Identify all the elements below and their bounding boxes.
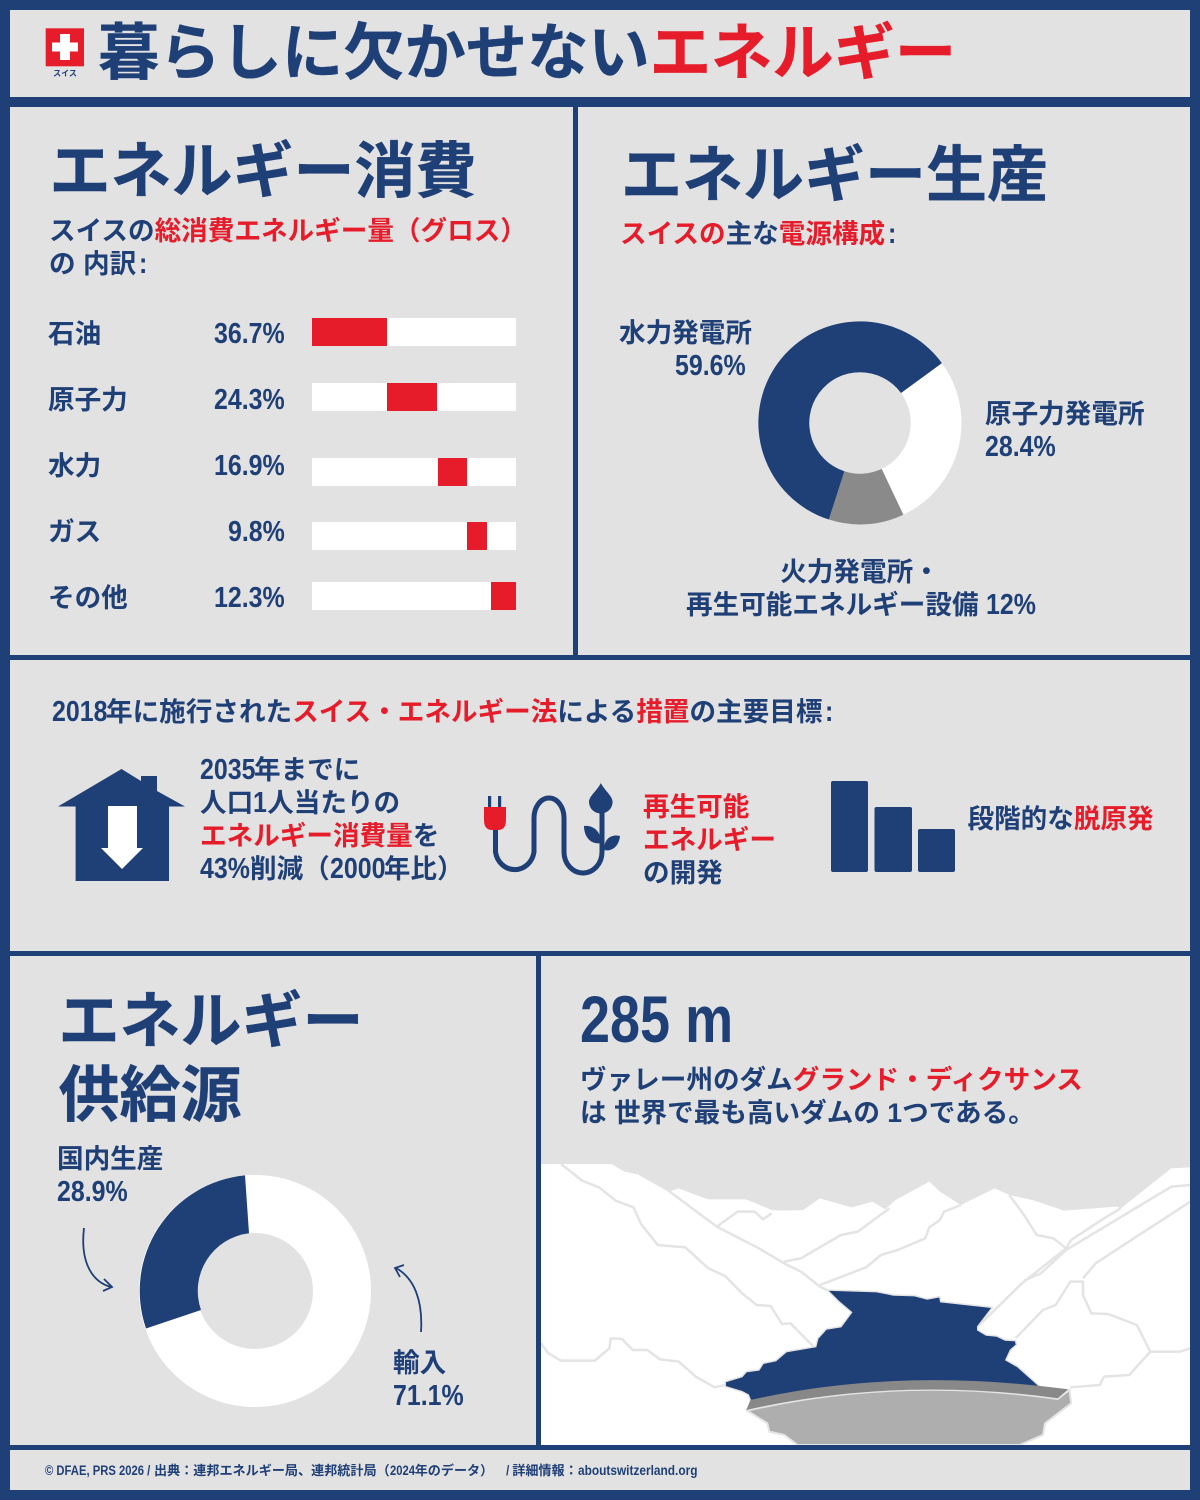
row: nuclear: 原子力 [48,385,128,415]
text: goal 3: 段階的な脱原発 [968,804,1154,834]
icon: house with down arrow [58,769,185,881]
subheading: power mix: スイスの主な電源構成 [620,219,885,249]
row: oil: 石油 [48,319,101,349]
row: other: 12.3% [214,582,285,614]
panel: energy act goals [10,660,1190,951]
text: goal 1 [200,754,464,885]
label: thermal and renewables [686,557,1036,621]
text: goal 1: 1 [253,787,267,819]
header band [10,10,1190,97]
subheading: gross consumption breakdown: : [139,248,147,280]
text: goal 2: 再生可能 [643,792,749,822]
label: nuclear plants [985,399,1145,463]
source text: 2024 [390,1463,415,1478]
label: imports: 輸入 [393,1348,446,1378]
source text: aboutswitzerland.org [578,1463,697,1478]
heading: energy consumption: エネルギー消費 [50,137,477,205]
row: oil: 36.7% [214,318,285,350]
label: hydro plants: 59.6% [675,350,746,382]
label: hydro plants [619,318,752,382]
donut chart: supply [139,1175,371,1407]
label: thermal and renewables: 再生可能エネルギー設備 [686,590,979,620]
row: nuclear [48,384,285,416]
heading: energy supply sources [58,987,364,1129]
row: oil [48,318,285,350]
heading: energy supply sources: 供給源 [58,1061,242,1129]
row: hydro: 水力 [48,451,101,481]
label: nuclear plants: 28.4% [985,431,1056,463]
subheading: gross consumption breakdown [49,216,527,280]
source text [45,1463,697,1478]
heading: energy supply sources: エネルギー [58,987,364,1055]
heading: measures of the 2018 Energy Act: 2018 [52,696,107,728]
bar: other [312,582,516,610]
text: world's highest dam [580,1065,1083,1128]
footer: source note [10,1450,1190,1490]
row: other: その他 [48,583,128,613]
label: thermal and renewables: 12% [986,589,1036,621]
title: 暮らしに欠かせないエネルギー [98,19,956,87]
stat: 285 m: 285 m [580,982,733,1056]
heading: energy production: エネルギー生産 [621,141,1048,209]
text: goal 1: 2000 [330,853,385,885]
source text: 出典：連邦エネルギー局、連邦統計局（ 年のデータ） 詳細情報： [154,1463,578,1478]
row: nuclear: 24.3% [214,384,285,416]
bar: oil [312,318,516,346]
text: goal 1: 人口 人当たりの [200,788,400,818]
panel: energy production [578,107,1190,655]
row: hydro: 16.9% [214,450,285,482]
panel: Grande Dixence dam [541,956,1190,1445]
label: imports: 71.1% [393,1380,464,1412]
label: nuclear plants: 原子力発電所 [985,399,1145,429]
bar: gas [312,522,516,550]
icon: descending bars [831,781,955,872]
subheading: power mix: : [888,218,896,250]
text: goal 1: 削減（ 年比） [250,854,464,884]
subheading: gross consumption breakdown: スイスの総消費エネルギー量（グロス） [49,216,527,246]
icon: Swiss flag [46,28,84,78]
text: goal 1: エネルギー消費量を [200,821,439,851]
donut chart: power sources [758,321,962,524]
row: other [48,582,285,614]
illustration: mountains and dam [541,1164,1190,1445]
icon: plug and plant [484,783,620,876]
label: domestic production: 国内生産 [57,1144,163,1174]
text: world's highest dam: は 世界で最も高いダムの 1つである。 [580,1098,1035,1128]
label: thermal and renewables: 火力発電所・ [780,557,940,587]
row: gas [48,516,285,548]
source text: / [506,1463,510,1478]
text: goal 2: エネルギー [643,825,776,855]
text: goal 1: 2035 [200,754,255,786]
bar: hydro [312,458,516,486]
row: hydro [48,450,285,482]
arrow: to domestic slice [82,1228,114,1292]
heading: measures of the 2018 Energy Act: 年に施行されたスイス・エネルギー法による措置の主要目標 [106,697,822,727]
panel: energy supply [10,956,536,1445]
icon: Swiss flag: スイス [53,69,77,78]
row: gas: 9.8% [228,516,285,548]
source text: © DFAE, PRS 2026 / [45,1463,150,1478]
text: goal 1: 43% [200,853,250,885]
arrow: to import slice [394,1264,422,1332]
text: goal 1: 年までに [254,755,360,785]
bar: nuclear [312,383,516,411]
label: domestic production [57,1144,163,1208]
heading: measures of the 2018 Energy Act: : [825,696,834,728]
label: imports [393,1348,464,1412]
row: gas: ガス [48,517,101,547]
panel: energy consumption [10,107,573,655]
text: world's highest dam: ヴァレー州のダムグランド・ディクサンス [580,1065,1083,1095]
label: domestic production: 28.9% [57,1176,128,1208]
label: hydro plants: 水力発電所 [619,318,752,348]
text: goal 2: の開発 [643,858,723,888]
subheading: gross consumption breakdown: の 内訳 [49,249,136,279]
text: goal 2 [643,792,776,888]
